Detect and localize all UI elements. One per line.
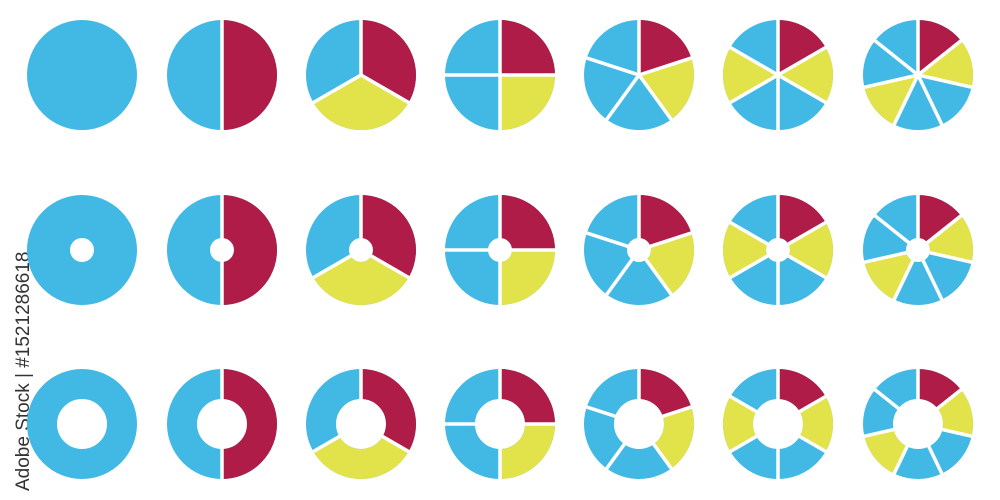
row 2: donuts small hole xyxy=(48,194,973,306)
pie 4 xyxy=(444,19,556,131)
donut 3 xyxy=(313,194,409,284)
ring 6 xyxy=(730,368,826,480)
watermark label: Adobe Stock id: Adobe Stock | #1521286618 xyxy=(13,252,34,491)
donut 6 xyxy=(730,194,826,306)
ring 3 xyxy=(313,368,409,464)
pie 3 xyxy=(313,19,409,103)
donut 2 xyxy=(188,194,256,306)
row 3: donuts large hole xyxy=(42,368,973,480)
ring 4 xyxy=(444,368,556,480)
donut 1 xyxy=(48,216,116,284)
pie 2 xyxy=(194,19,250,131)
donut 4 xyxy=(444,194,556,306)
ring 7 xyxy=(863,368,973,474)
ring 2 xyxy=(182,368,262,480)
pie 6 xyxy=(730,19,826,131)
ring 1 xyxy=(42,384,122,464)
donut 5 xyxy=(586,194,692,295)
donut 7 xyxy=(863,194,973,300)
ring 5 xyxy=(586,368,692,469)
pie 7 xyxy=(863,19,973,125)
pie 1 xyxy=(54,48,110,102)
pie 5 xyxy=(586,19,692,120)
row 1: full pies xyxy=(54,19,973,131)
